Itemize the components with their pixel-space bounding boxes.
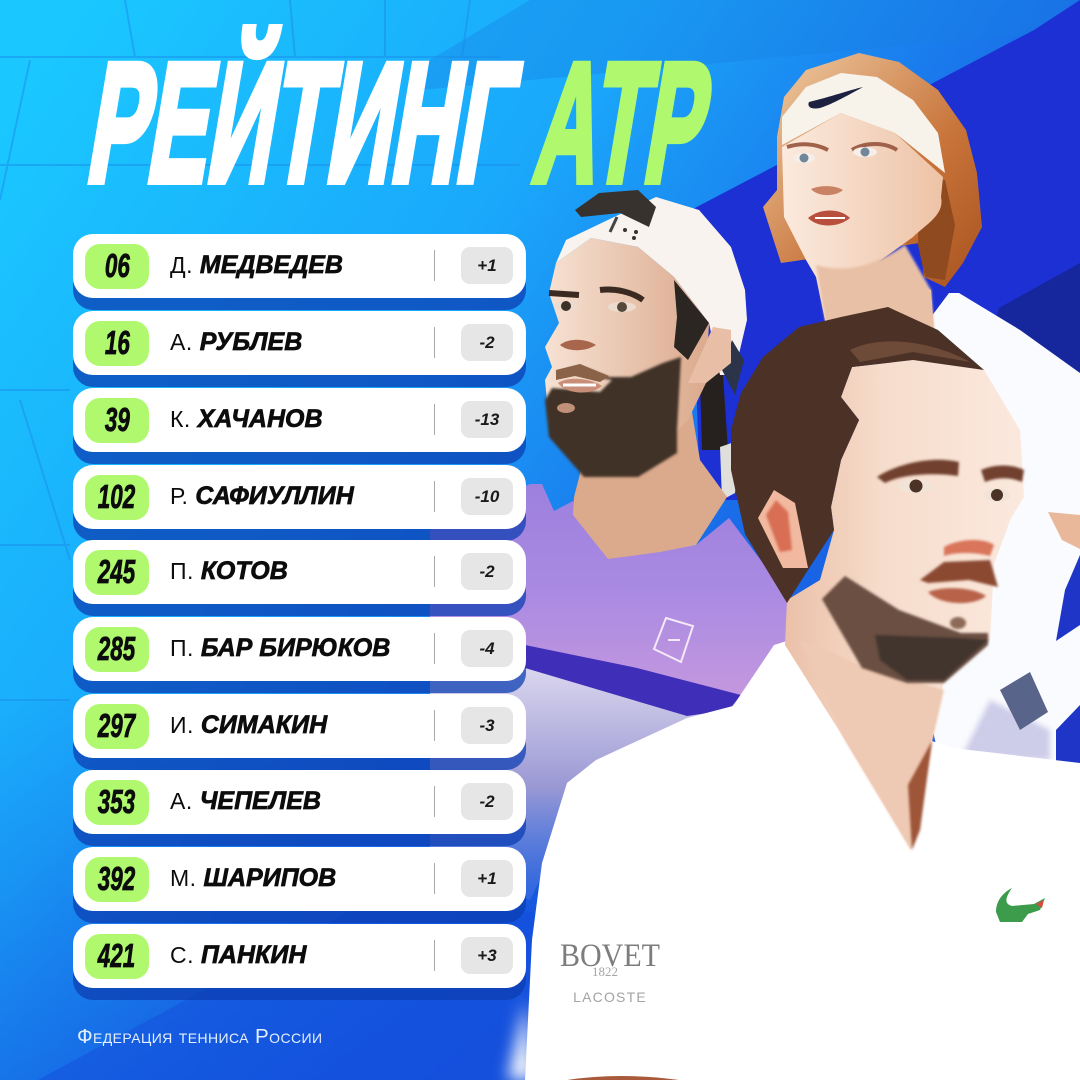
row 4: Р. САФИУЛЛИН [170,482,354,510]
row 8: А. ЧЕПЕЛЕВ [170,787,321,815]
row 9: 392 [98,860,136,897]
row 7: -3 [479,716,495,735]
row 6: 285 [98,630,136,667]
row 10: 421 [98,937,136,974]
row 3: -13 [475,410,499,429]
row 7 [73,694,526,758]
row 10 [73,924,526,988]
row 6: -4 [479,639,495,658]
row 5: П. КОТОВ [170,557,288,585]
row 6: П. БАР БИРЮКОВ [170,634,390,662]
row 2: -2 [479,333,495,352]
title word: ATP: АТР [525,29,723,218]
row 8: -2 [479,792,495,811]
shirt text: LACOSTE [573,989,647,1005]
row 5 [73,540,526,604]
row 9 [73,847,526,911]
row 3: К. ХАЧАНОВ [170,405,323,433]
row 1: Д. МЕДВЕДЕВ [170,251,343,279]
player: Rublev [763,53,1080,765]
row 10: С. ПАНКИН [170,941,306,969]
row 2 [73,311,526,375]
shirt text [560,938,660,1005]
row 1: 06 [105,247,129,284]
row 4 [73,465,526,529]
row 1: +1 [477,256,497,275]
row 8 [73,770,526,834]
row 8: 353 [98,783,136,820]
ranking table [73,234,526,1000]
row 9: М. ШАРИПОВ [170,864,336,892]
row 5: 245 [98,553,136,590]
row 6 [73,617,526,681]
row 2: 16 [105,324,129,361]
title word: РЕЙТИНГ: РЕЙТИНГ [78,27,530,218]
row 3: 39 [105,401,129,438]
shirt text: BOVET [560,938,660,974]
source credit: Федерация тенниса России [77,1025,322,1048]
row 7: И. СИМАКИН [170,711,327,739]
player: Medvedev [508,307,1080,1080]
row 5: -2 [479,562,495,581]
logo: crocodile [996,888,1045,922]
row 9: +1 [477,869,497,888]
row 3 [73,388,526,452]
row 2: А. РУБЛЕВ [170,328,302,356]
shirt text: 1822 [592,964,618,979]
row 4: -10 [475,487,499,506]
player: Khachanov [430,190,790,900]
row 4: 102 [98,478,136,515]
row 7: 297 [98,707,136,744]
row 10: +3 [477,946,497,965]
row 1 [73,234,526,298]
